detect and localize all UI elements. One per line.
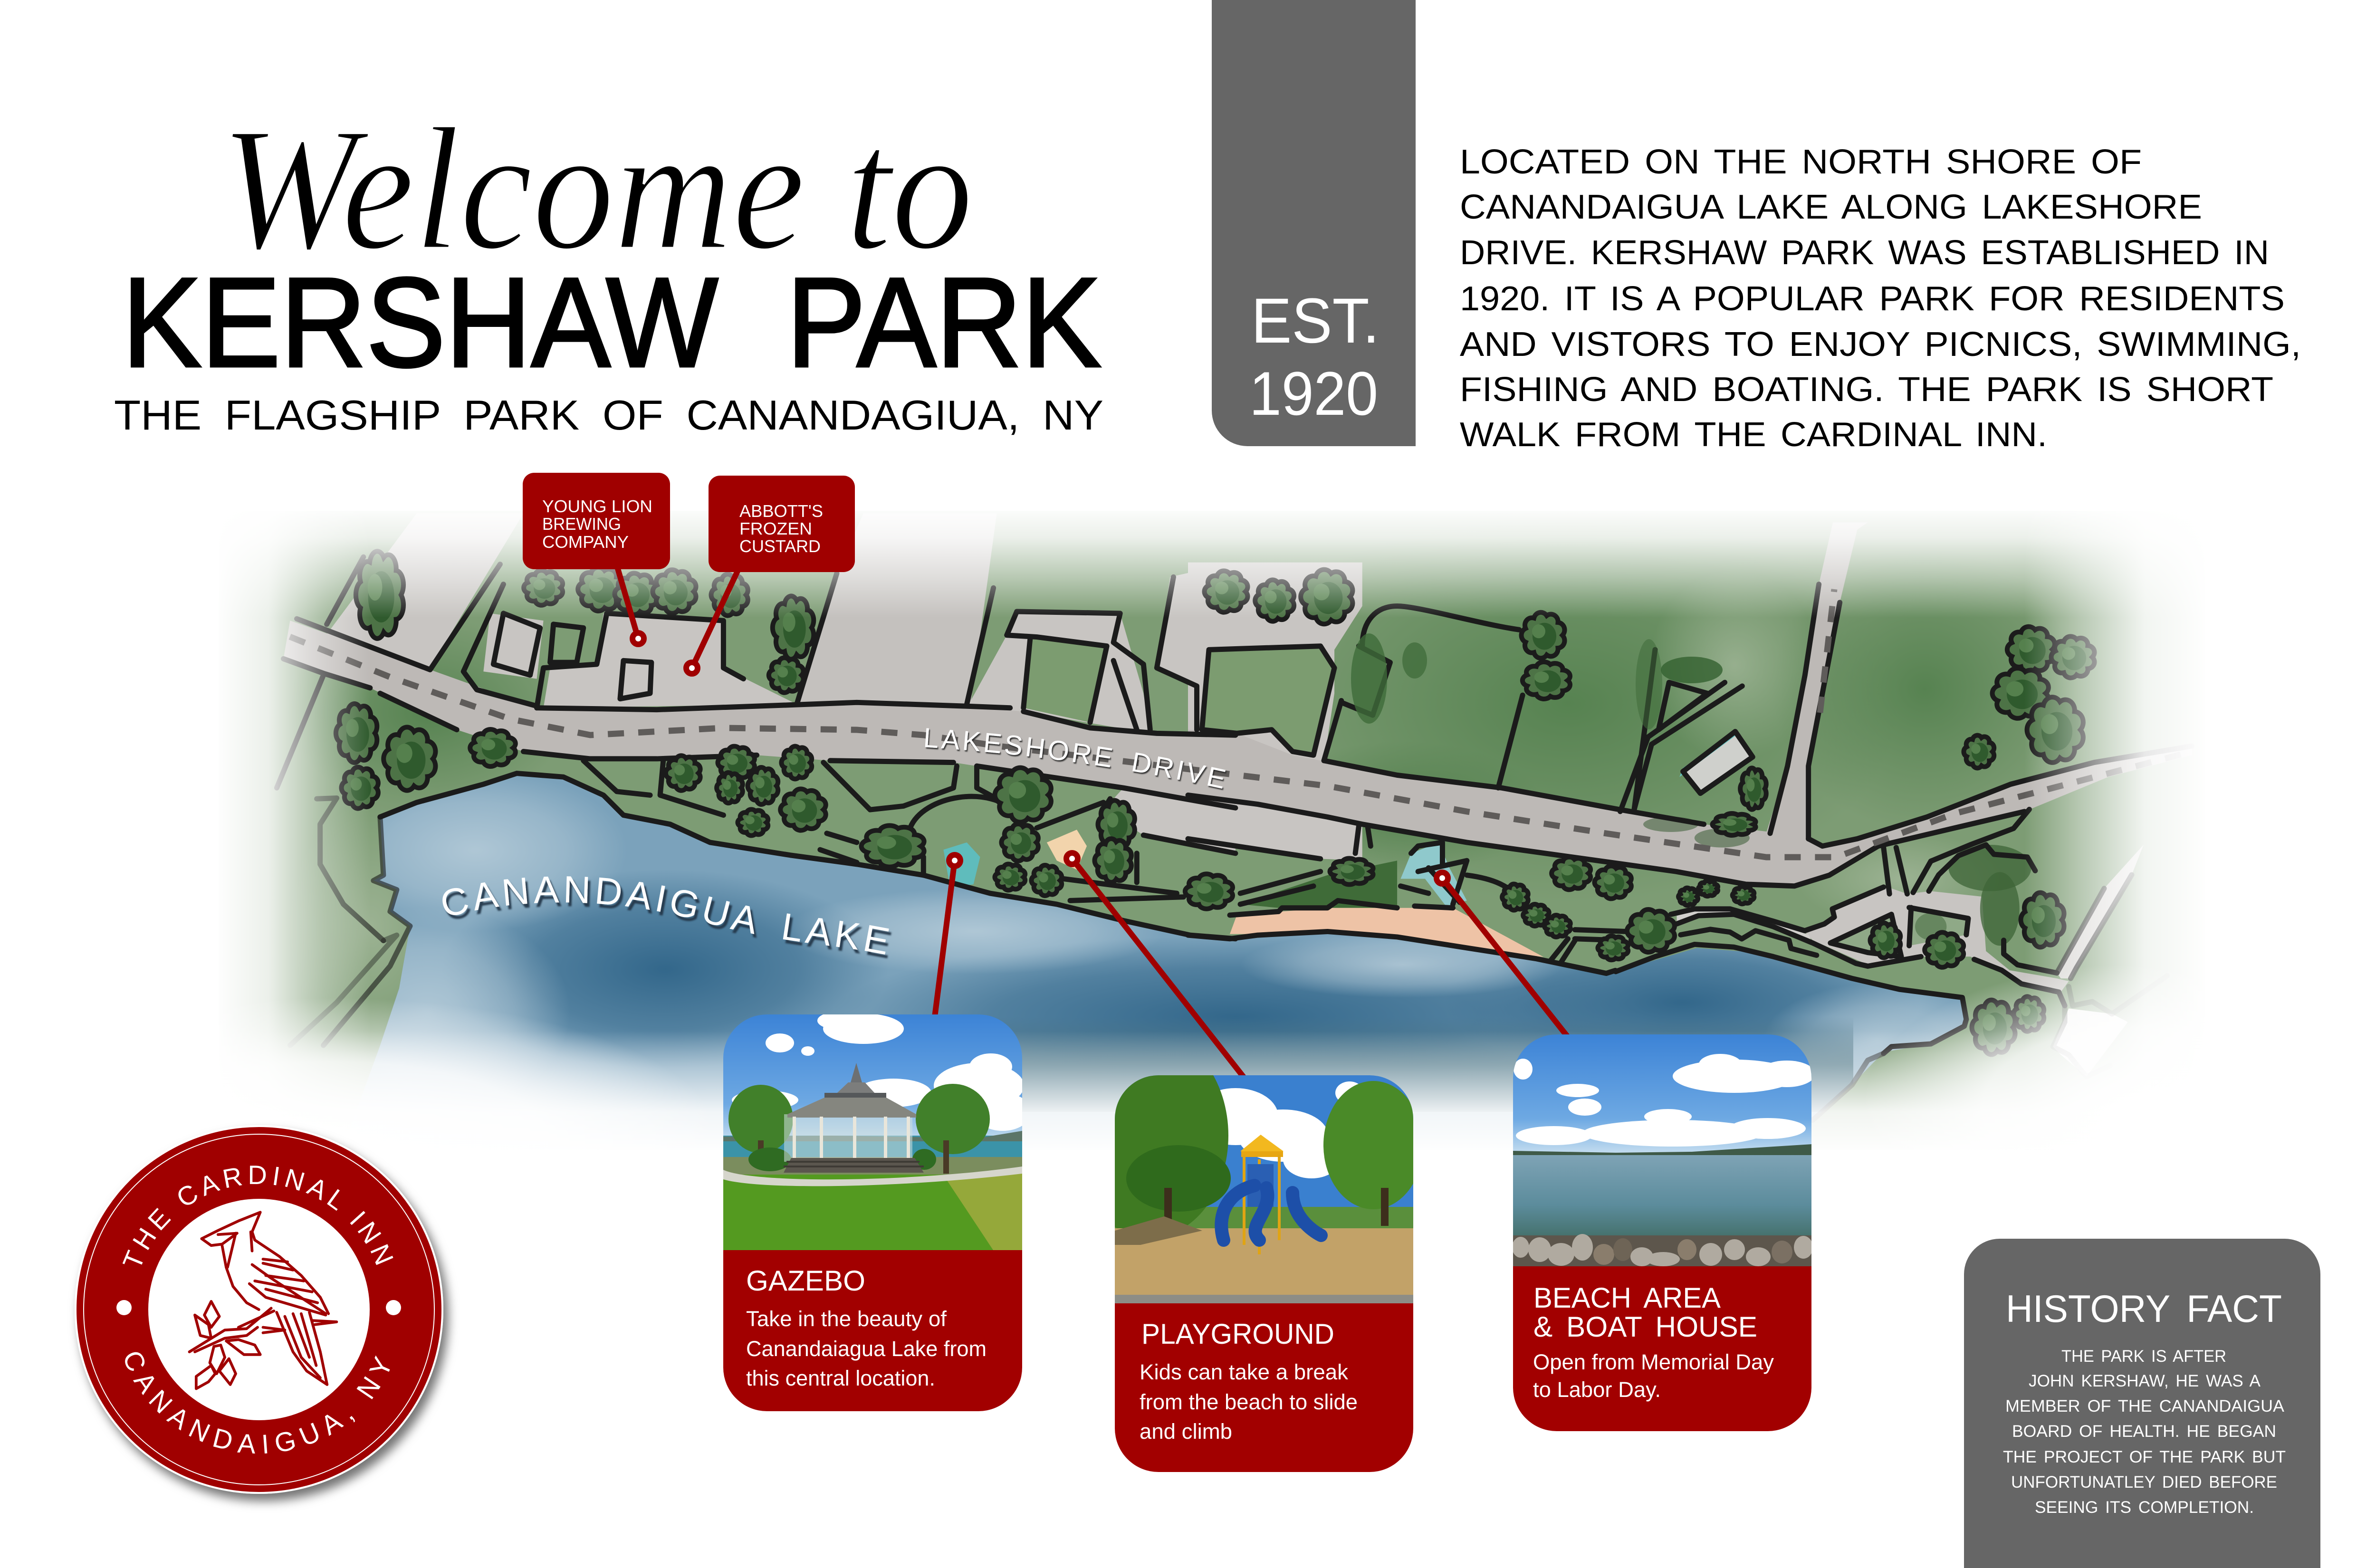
pin: Young Lion (617, 565, 644, 644)
pin: playground (1066, 853, 1244, 1078)
card text: Kids can take a break (1140, 1360, 1348, 1384)
intro text block: LOCATED ON THE NORTH SHORE OF (1460, 143, 2142, 181)
subtitle: THE FLAGSHIP PARK OF CANANDAGIUA, NY (114, 392, 1103, 439)
photo: gazebo (723, 1012, 1031, 1250)
intro text block: 1920. IT IS A POPULAR PARK FOR RESIDENTS (1460, 280, 2285, 318)
card text: to Labor Day. (1533, 1377, 1661, 1402)
card caption background (723, 1250, 1022, 1411)
icon: cardinal bird on branch (189, 1212, 336, 1389)
card text: Canandaiagua Lake from (746, 1337, 987, 1361)
card: beach area and boat house (1512, 1034, 1815, 1431)
card heading: PLAYGROUND (1141, 1318, 1334, 1350)
card caption background (1513, 1266, 1811, 1431)
card caption background (1115, 1303, 1413, 1472)
title main line: KERSHAW PARK (122, 251, 1101, 393)
callout pins and leader lines (617, 565, 1568, 1078)
history text: THE PROJECT OF THE PARK BUT (2003, 1448, 2286, 1466)
intro text block: DRIVE. KERSHAW PARK WAS ESTABLISHED IN (1460, 234, 2269, 272)
ink lines, southeast park (1616, 809, 2167, 1120)
beach sand and site patches (943, 732, 1753, 957)
callout: Abbott's Frozen Custard: CUSTARD (739, 536, 821, 556)
callout: Abbott's Frozen Custard: ABBOTT'S (739, 501, 823, 521)
east park paths and patches (1643, 817, 2144, 1077)
intro text block (1460, 143, 2301, 454)
logo: The Cardinal Inn badge (75, 1125, 443, 1494)
history text: BOARD OF HEALTH. HE BEGAN (2012, 1422, 2276, 1441)
label: Lakeshore Drive: LAKESHORE DRIVE (922, 722, 1231, 795)
card heading: GAZEBO (746, 1265, 865, 1297)
est year: 1920 (1249, 359, 1378, 428)
card text: from the beach to slide (1140, 1390, 1358, 1414)
pin: Abbott's (686, 570, 738, 674)
history text: SEEING ITS COMPLETION. (2035, 1498, 2254, 1517)
photo: playground (1072, 1033, 1423, 1303)
card text: Open from Memorial Day (1533, 1350, 1774, 1374)
est label: EST. (1251, 286, 1380, 356)
panel: history fact (1964, 1239, 2320, 1568)
callout: Young Lion Brewing Company: YOUNG LION (542, 497, 652, 516)
callout: Abbott's Frozen Custard: FROZEN (739, 519, 812, 538)
roads (283, 522, 2192, 886)
intro text block: WALK FROM THE CARDINAL INN. (1460, 416, 2047, 454)
gray lots east (1188, 563, 1397, 908)
road and shoreline ink lines, west (277, 557, 1236, 1045)
card text: this central location. (746, 1366, 935, 1390)
card text (1140, 1360, 1358, 1444)
intro text block: FISHING AND BOATING. THE PARK IS SHORT (1460, 371, 2273, 409)
history text: THE PARK IS AFTER (2061, 1347, 2226, 1366)
card: gazebo (723, 1012, 1031, 1411)
card text (1533, 1350, 1774, 1402)
intro text block: AND VISTORS TO ENJOY PICNICS, SWIMMING, (1460, 325, 2301, 363)
card text (746, 1307, 987, 1390)
card text: and climb (1140, 1419, 1232, 1444)
callout: Abbott's Frozen Custard (709, 476, 855, 572)
lake (371, 776, 1964, 1111)
history text: UNFORTUNATLEY DIED BEFORE (2011, 1473, 2277, 1492)
map land wash (219, 504, 2205, 1150)
road center dashes (290, 589, 2192, 857)
pin: beach (1437, 872, 1568, 1037)
callout: Young Lion Brewing Company: COMPANY (542, 532, 629, 552)
label: Canandaigua Lake: CANANDAIGUA LAKE (436, 868, 896, 964)
card heading: & BOAT HOUSE (1533, 1311, 1757, 1343)
title (114, 92, 1103, 439)
card heading (1533, 1282, 1757, 1343)
title script line: Welcome to (220, 92, 973, 287)
history text (2003, 1347, 2286, 1517)
intro text block: CANANDAIGUA LAKE ALONG LAKESHORE (1460, 188, 2202, 226)
road and shoreline ink lines, east (1188, 584, 2192, 973)
pin: gazebo (935, 855, 960, 1017)
map edge fades (0, 499, 2376, 1283)
history heading: HISTORY FACT (2006, 1288, 2282, 1330)
card text: Take in the beauty of (746, 1307, 947, 1331)
callout: Young Lion Brewing Company: BREWING (542, 514, 621, 534)
history text: JOHN KERSHAW, HE WAS A (2029, 1372, 2261, 1390)
logo text: top arc: THE CARDINAL INN (117, 1160, 401, 1273)
gray lots west (324, 513, 1236, 853)
callout: Young Lion Brewing Company (523, 473, 670, 569)
photo: beach (1512, 1034, 1815, 1266)
established panel (1212, 0, 1416, 446)
logo text: bottom arc: CANANDAIGUA, NY (116, 1346, 402, 1460)
trees (336, 551, 2095, 1054)
card: playground (1072, 1033, 1423, 1472)
history text: MEMBER OF THE CANANDAIGUA (2005, 1397, 2285, 1415)
map: Kershaw Park watercolor map (235, 517, 2187, 1130)
card heading: BEACH AREA (1533, 1282, 1721, 1314)
